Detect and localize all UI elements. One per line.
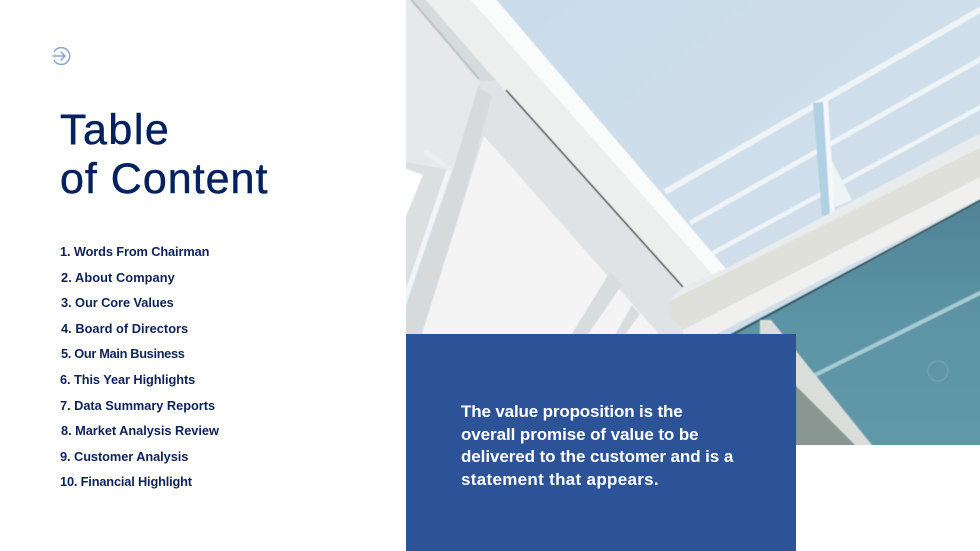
- table of contents list: 3. Our Core Values: [61, 295, 174, 310]
- small circle detail: [928, 361, 948, 381]
- table of contents list: 10. Financial Highlight: [60, 474, 192, 489]
- icon: arrow in circle: [52, 46, 70, 66]
- table of contents list: 7. Data Summary Reports: [60, 398, 215, 413]
- balcony white stripe: [683, 172, 980, 340]
- table of contents list: 8. Market Analysis Review: [61, 423, 219, 438]
- teal stripe: [797, 288, 980, 384]
- photo contents: [396, 0, 980, 460]
- table of contents list: [60, 244, 219, 489]
- title: Table: [60, 106, 170, 154]
- title: of Content: [60, 154, 268, 202]
- grey underside of lower beam: [797, 387, 870, 460]
- railings: [665, 4, 980, 253]
- photo: building and railing against sky: [406, 0, 980, 445]
- left wall: [396, 0, 481, 330]
- callout text: delivered to the customer and is a: [461, 447, 733, 466]
- pane reflections: [568, 272, 622, 340]
- teal underside: [700, 195, 980, 460]
- callout text: statement that appears.: [461, 470, 659, 488]
- beam shadow line: [506, 90, 683, 287]
- main beam face: [417, 0, 727, 287]
- table of contents list: 9. Customer Analysis: [60, 449, 188, 464]
- white window pane: [420, 136, 660, 340]
- title: [60, 106, 268, 202]
- table of contents list: 5. Our Main Business: [61, 346, 185, 361]
- sky: [396, 0, 980, 460]
- callout panel: [406, 334, 796, 551]
- balcony ledge face: [668, 143, 980, 330]
- dark ledge line: [732, 195, 980, 335]
- left wall with window: [396, 160, 449, 315]
- diagonal white beam lower: [760, 320, 884, 460]
- table of contents list: 6. This Year Highlights: [60, 372, 195, 387]
- beam groove: [404, 0, 496, 82]
- table of contents list: 2. About Company: [61, 270, 175, 285]
- balcony ledge top: [668, 128, 980, 302]
- callout text: [461, 402, 734, 488]
- pillar: [409, 78, 690, 340]
- table of contents list: 1. Words From Chairman: [60, 244, 209, 259]
- callout text: overall promise of value to be: [461, 424, 699, 444]
- callout text: The value proposition is the: [461, 402, 683, 421]
- pillar side strip: [396, 87, 492, 340]
- beam white band: [462, 0, 727, 275]
- left pipe: [400, 170, 449, 315]
- table of contents list: 4. Board of Directors: [61, 321, 188, 336]
